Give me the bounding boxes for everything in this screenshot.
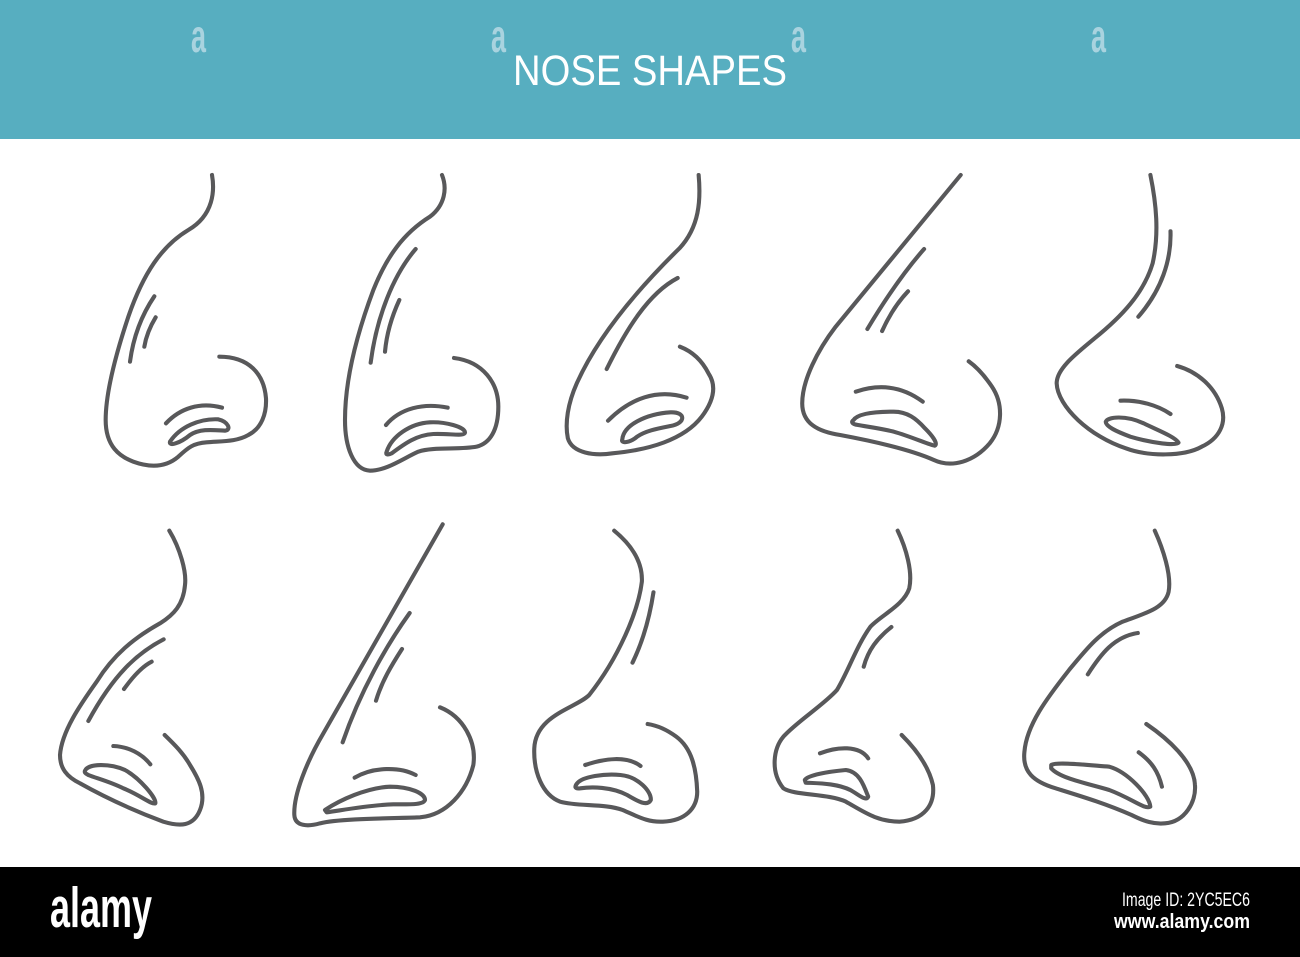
watermark marks in banner: a bbox=[191, 10, 206, 62]
nose 3 bbox=[567, 175, 713, 454]
nose 10 bbox=[1024, 531, 1195, 824]
image id: Image ID: 2YC5EC6 bbox=[1122, 890, 1250, 911]
nose 4 bbox=[802, 175, 1000, 464]
nose 7 bbox=[294, 524, 474, 825]
nose 5 bbox=[1057, 175, 1223, 454]
website: www.alamy.com bbox=[1113, 911, 1250, 933]
watermark marks in banner bbox=[191, 10, 1106, 62]
watermark marks in banner: a bbox=[791, 10, 806, 62]
nose 1 bbox=[106, 175, 266, 466]
watermark marks in banner: a bbox=[1091, 10, 1106, 62]
title: NOSE SHAPES bbox=[513, 47, 787, 95]
nose 6 bbox=[60, 531, 202, 825]
nose 2 bbox=[345, 175, 498, 471]
header banner bbox=[0, 0, 1300, 139]
nose 9 bbox=[775, 531, 933, 822]
nose 8 bbox=[534, 531, 697, 822]
watermark marks in banner: a bbox=[491, 10, 506, 62]
footer bar bbox=[0, 867, 1300, 957]
footer logo: alamy bbox=[50, 876, 152, 940]
